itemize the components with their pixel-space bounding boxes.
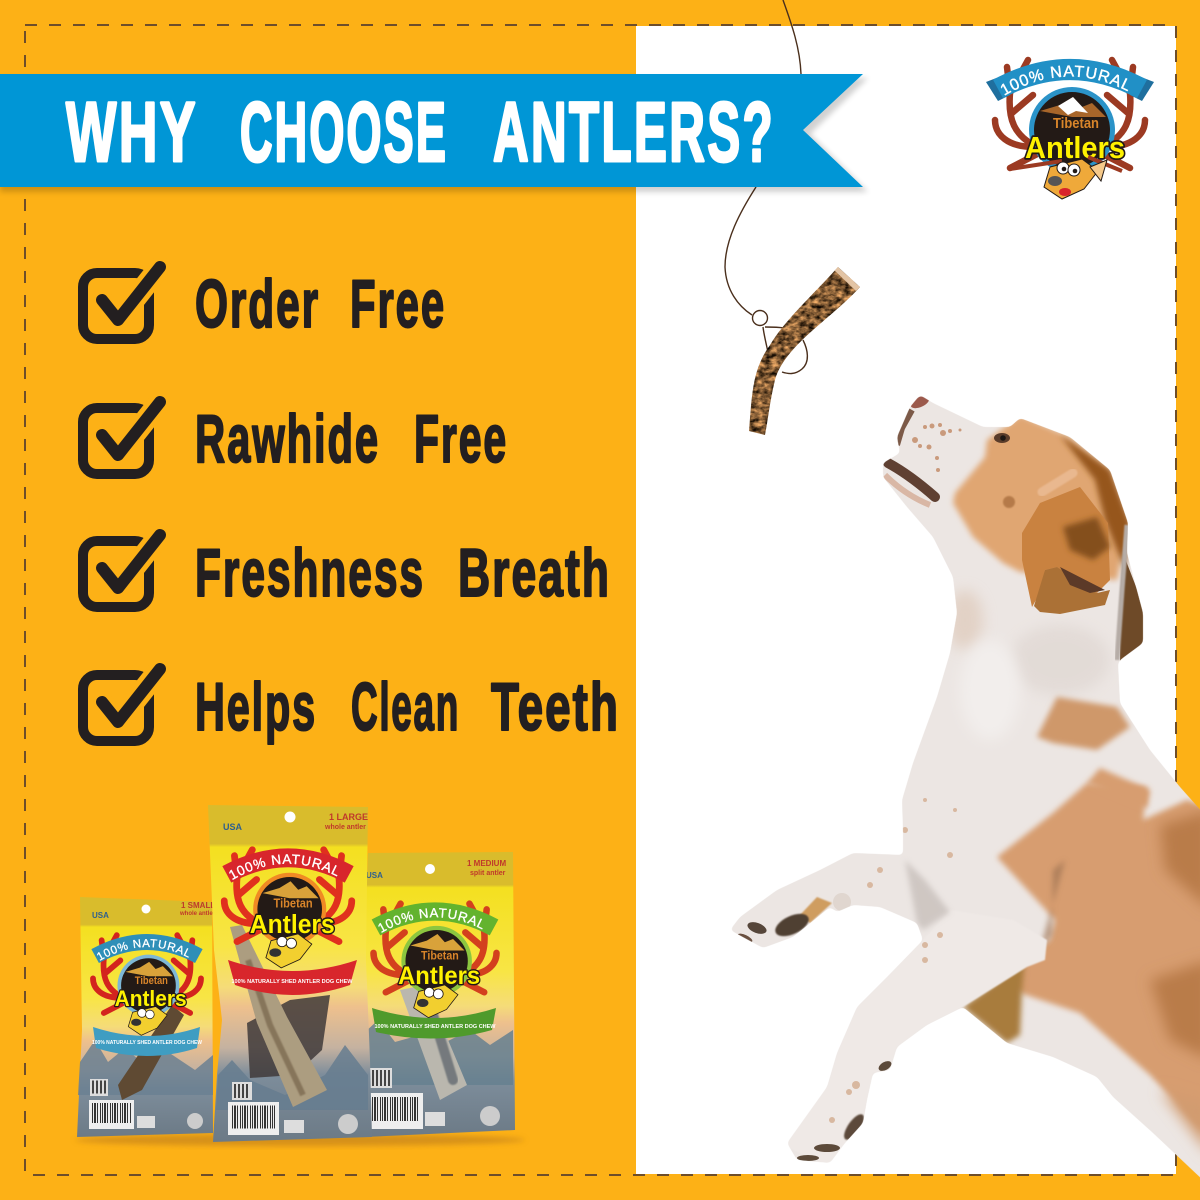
benefit: Helps Clean Teeth: Teeth [491, 669, 620, 745]
benefit: Order Free [83, 266, 446, 342]
benefit: Freshness Breath: Freshness [195, 535, 425, 611]
title [66, 85, 775, 179]
bag: medium: 100% NATURALLY SHED ANTLER DOG CHEW [374, 1024, 496, 1030]
benefit: Freshness Breath: Breath [458, 535, 611, 611]
benefit: Rawhide Free: Rawhide [195, 401, 380, 477]
bag: large: 100% NATURAL [229, 854, 338, 880]
bag: small: 100% NATURALLY SHED ANTLER DOG CHEW [92, 1040, 202, 1046]
bag: small: 1 SMALL [181, 901, 215, 910]
bag: medium: 100% NATURAL [378, 908, 483, 933]
bag: large: whole antler [324, 824, 366, 831]
antler chew stick [749, 267, 860, 435]
dog paws [736, 893, 893, 1161]
benefit: Rawhide Free: Free [414, 401, 508, 477]
dog head [885, 393, 1145, 664]
bag: large: Antlers [250, 909, 335, 939]
bag: small: whole antler [179, 911, 216, 917]
bag: medium [366, 852, 515, 1137]
title: CHOOSE [240, 85, 448, 179]
bag: large: USA [223, 822, 243, 832]
bag: medium: Tibetan [421, 948, 459, 962]
hanging rope [725, 0, 807, 374]
bag: large: Tibetan [274, 896, 313, 911]
bag: small: USA [92, 911, 109, 920]
logo: 100% NATURAL [1000, 65, 1128, 96]
dog fur patches [829, 694, 1200, 1155]
bag: small: Antlers [115, 986, 187, 1011]
logo: Tibetan [1053, 115, 1099, 132]
bag: large: 1 LARGE [329, 812, 368, 822]
bag: medium: Antlers [398, 962, 480, 990]
product bags [77, 805, 522, 1148]
title: ANTLERS? [493, 85, 775, 179]
benefit: Helps Clean Teeth: Helps [195, 669, 317, 745]
dog neck shading [952, 588, 1106, 730]
bag: small: 100% NATURAL [97, 939, 189, 961]
banner [0, 74, 868, 192]
bag: medium: split antler [470, 870, 506, 877]
benefit: Order Free: Free [350, 266, 446, 342]
bag: medium: USA [366, 871, 383, 880]
bag: small [77, 897, 216, 1137]
bag: large: 100% NATURALLY SHED ANTLER DOG CHEW [231, 979, 353, 985]
bag: small: Tibetan [135, 975, 168, 987]
benefit: Helps Clean Teeth: Clean [351, 669, 460, 745]
logo [986, 56, 1154, 200]
benefit: Order Free: Order [195, 266, 320, 342]
benefit: Helps Clean Teeth [83, 669, 620, 745]
benefit: Freshness Breath [83, 535, 611, 611]
dog [720, 385, 1200, 1185]
logo: Antlers [1025, 130, 1125, 165]
bag: medium: 1 MEDIUM [467, 859, 506, 868]
bag: large [208, 805, 372, 1142]
title: WHY [66, 85, 198, 179]
dog body base [720, 385, 1200, 1185]
white panel [636, 26, 1176, 1174]
